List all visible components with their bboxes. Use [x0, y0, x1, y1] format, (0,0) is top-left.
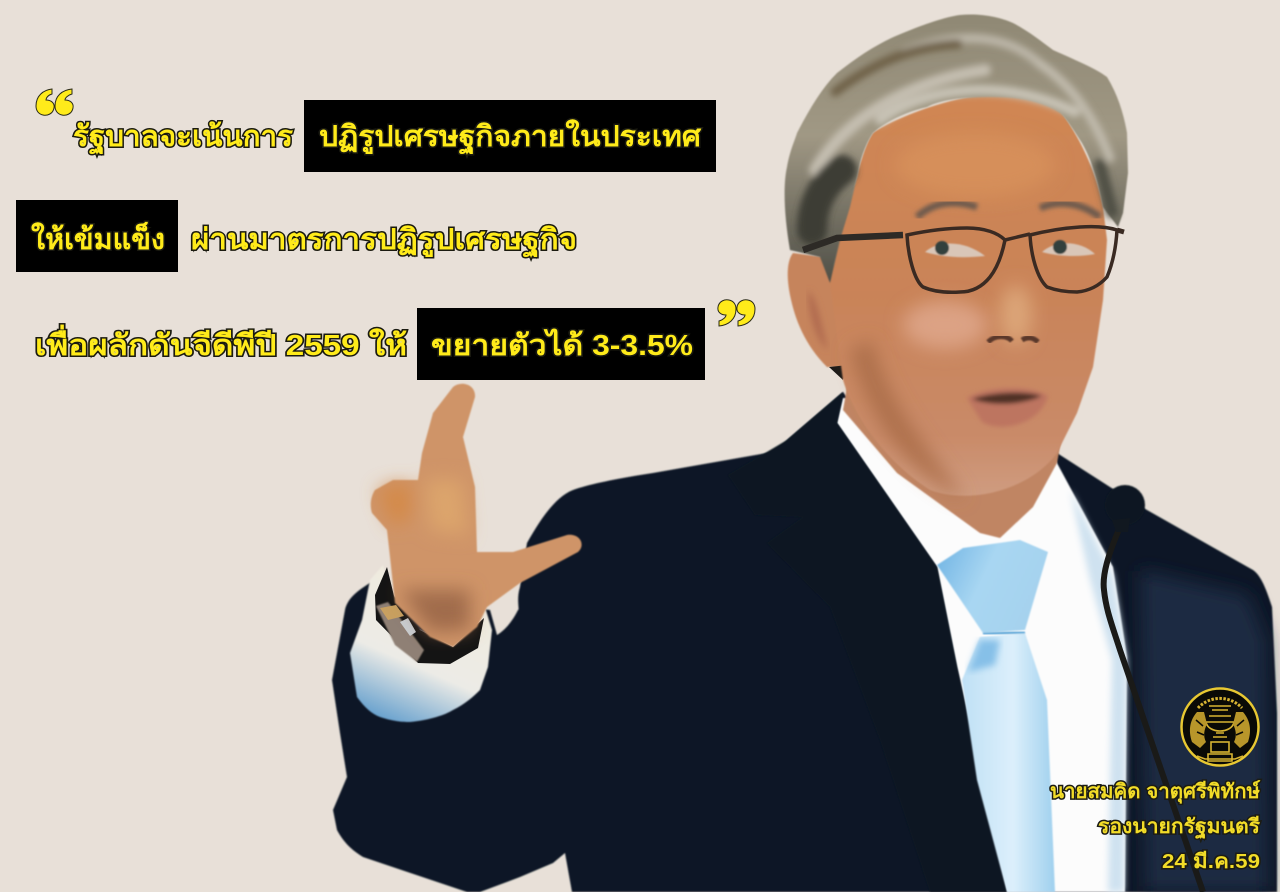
glasses [803, 227, 1124, 292]
position: รองนายกรัฐมนตรี [1098, 815, 1260, 840]
text line 2: ผ่านมาตรการปฏิรูปเศรษฐกิจ [191, 224, 577, 258]
shirt [837, 398, 1127, 892]
quote block [16, 89, 755, 380]
eyebrows [917, 203, 1100, 217]
highlight box 2 [16, 200, 178, 272]
tie [937, 540, 1055, 892]
photo: speaker [332, 14, 1277, 892]
shirt shadow [1070, 490, 1127, 892]
ear [788, 253, 850, 367]
name: นายสมคิด จาตุศรีพิทักษ์ [1050, 780, 1260, 804]
eyes [925, 240, 1095, 257]
icon: government seal [1182, 688, 1258, 766]
date: 24 มี.ค.59 [1162, 850, 1260, 873]
under-ear shadow [829, 365, 848, 380]
highlight box 3: ขยายตัวได้ 3-3.5% [431, 328, 693, 362]
highlight box 3 [417, 308, 705, 380]
microphone [1104, 485, 1203, 892]
jacket [332, 392, 1277, 892]
cheek highlight [903, 301, 987, 349]
caption: speaker name and date [1050, 780, 1260, 873]
opening quotation mark [36, 89, 73, 115]
wristwatch [375, 567, 484, 664]
nose [988, 285, 1038, 345]
forehead highlight [895, 133, 1055, 197]
neck and chin shade [843, 370, 1065, 538]
mouth [967, 388, 1048, 427]
jaw shade [850, 340, 965, 500]
highlight box 1 [304, 100, 716, 172]
text line 3: เพื่อผลักดันจีดีพีปี 2559 ให้ [35, 324, 407, 362]
hand [371, 384, 582, 647]
face [830, 94, 1107, 496]
highlight box 1: ปฏิรูปเศรษฐกิจภายในประเทศ [319, 119, 702, 155]
ear inner shade [808, 290, 828, 350]
jacket right panel shade [1140, 570, 1268, 892]
shirt cuff [350, 565, 492, 722]
text line 1: รัฐบาลจะเน้นการ [73, 121, 293, 155]
closing quotation mark [718, 300, 755, 326]
hair [785, 14, 1128, 283]
left lapel [728, 392, 1007, 892]
hand shading [378, 480, 470, 632]
highlight box 2: ให้เข้มแข็ง [31, 221, 165, 256]
